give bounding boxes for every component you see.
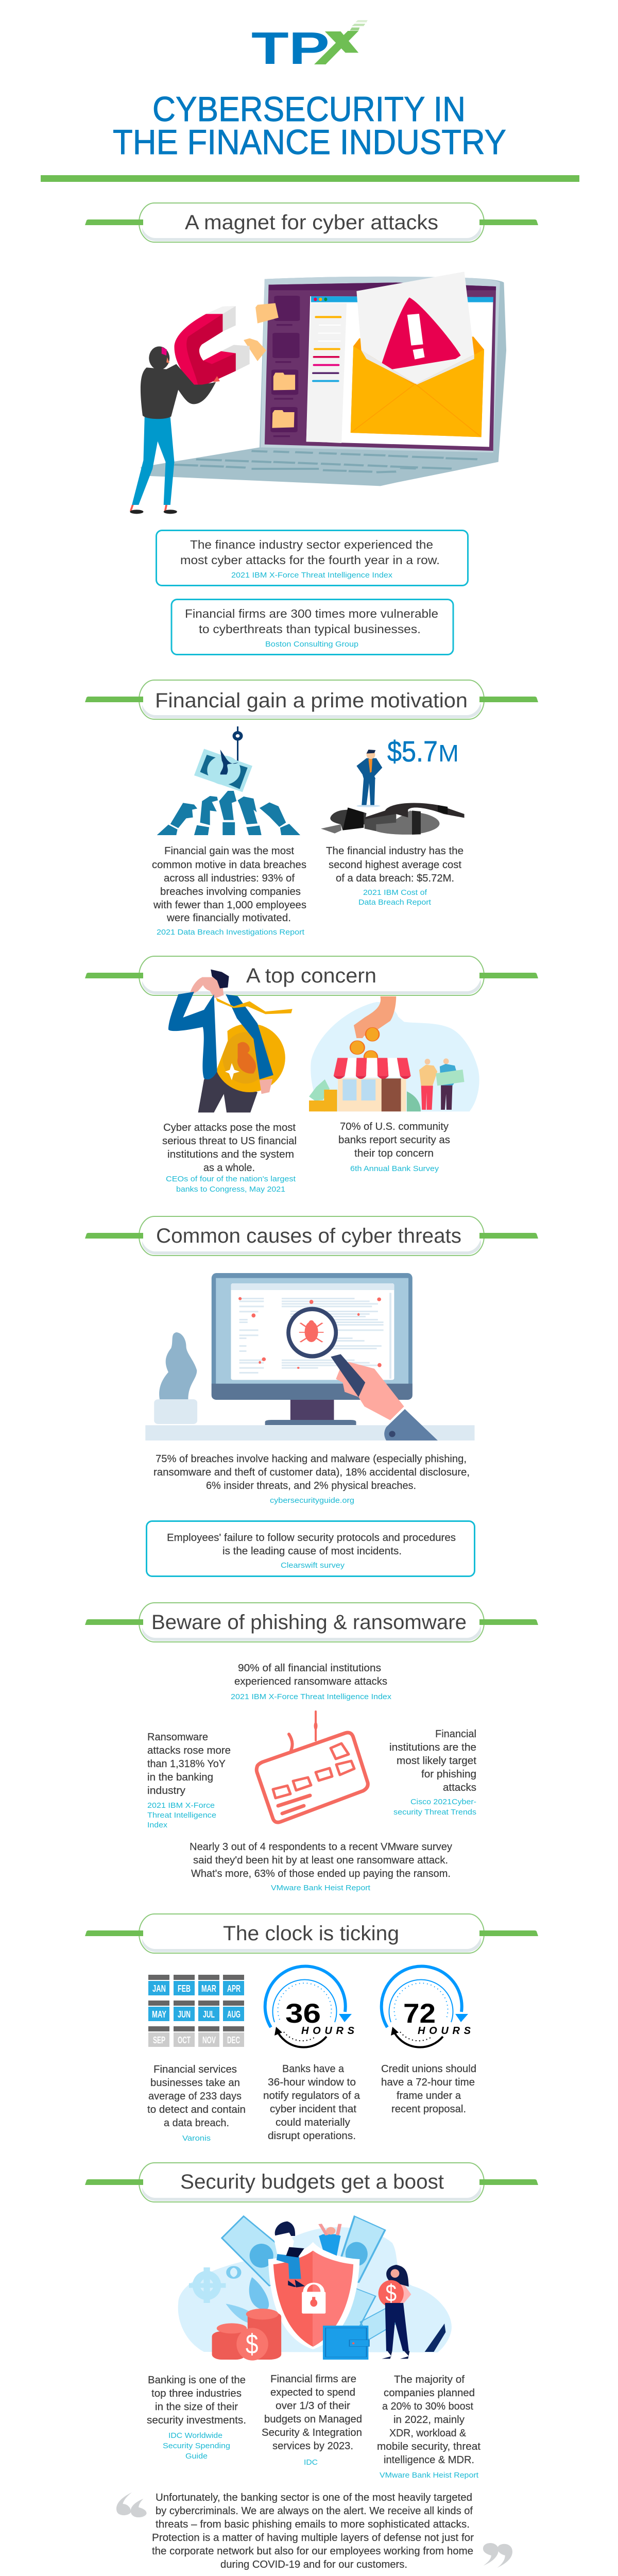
icon: twelve month calendar <box>148 1975 244 2047</box>
icon: closing quote mark <box>483 2543 512 2568</box>
text: spending on managed security <box>262 2374 362 2467</box>
text: top threat: serious threat to US financial <box>162 1136 297 1147</box>
illustration: monitor, magnifier and bug <box>145 1273 475 1440</box>
text: breach cost: of a data breach: $5.72M. <box>336 873 454 884</box>
text: ransomware rose: Threat Intelligence <box>147 1811 216 1820</box>
icon: twelve month calendar: MAR <box>201 1984 216 1994</box>
panel: callout employees: Clearswift survey <box>281 1561 345 1570</box>
icon: 72 hours clock: HOURS <box>418 2025 471 2037</box>
text: breach cost: second highest average cost <box>329 859 461 871</box>
heading: The clock is ticking <box>85 1914 538 1953</box>
text: financial gain: common motive in data breaches <box>152 859 306 871</box>
text: ransomware 90%: 2021 IBM X-Force Threat Intelligence Index <box>231 1692 392 1701</box>
text: top three industries: security investments. <box>147 2415 246 2426</box>
text: quote: during COVID-19 and for our customers. <box>220 2559 407 2570</box>
text: budget boost: The majority of <box>394 2374 465 2385</box>
text: 72-hour frame: have a 72-hour time <box>381 2077 475 2088</box>
text: 72-hour frame: frame under a <box>397 2090 461 2102</box>
icon: twelve month calendar: APR <box>227 1984 241 1994</box>
icon: twelve month calendar: JUL <box>203 2009 215 2020</box>
text: 72-hour frame: recent proposal. <box>391 2104 466 2115</box>
text: top three industries: IDC Worldwide <box>168 2431 222 2440</box>
text: top threat: as a whole. <box>203 1162 255 1174</box>
icon: twelve month calendar: SEP <box>153 2035 165 2045</box>
text: breach cost: Data Breach Report <box>358 898 432 907</box>
heading: Financial gain a prime motivation: Financial gain a prime motivation <box>155 689 468 712</box>
text: ransomware rose: 2021 IBM X-Force <box>147 1801 215 1810</box>
panel: callout 300 times <box>171 600 453 654</box>
heading: A top concern <box>85 956 538 995</box>
icon: twelve month calendar: AUG <box>227 2009 241 2020</box>
heading: Common causes of cyber threats <box>85 1216 538 1256</box>
heading: A magnet for cyber attacks: A magnet for cyber attacks <box>185 211 438 234</box>
text: budget boost: XDR, workload & <box>389 2428 467 2439</box>
heading: A magnet for cyber attacks <box>85 203 538 242</box>
text: financial gain: 2021 Data Breach Investigations Report <box>157 928 305 937</box>
text: VMware survey: VMware Bank Heist Report <box>271 1884 371 1892</box>
text: spending on managed security: budgets on Managed <box>264 2414 362 2425</box>
text: 36-hour window: notify regulators of a <box>263 2090 360 2102</box>
text: community banks <box>338 1121 450 1173</box>
text: ransomware rose: attacks rose more <box>147 1745 231 1756</box>
figure: $5.7M: $5.7 <box>387 735 438 768</box>
heading: The clock is ticking: The clock is ticking <box>223 1922 399 1945</box>
title: CYBERSECURITY IN <box>152 90 466 129</box>
text: budget boost: VMware Bank Heist Report <box>380 2471 479 2480</box>
text: 72-hour frame: Credit unions should <box>381 2063 476 2075</box>
heading: Beware of phishing & ransomware <box>85 1603 538 1642</box>
panel: callout most attacked: 2021 IBM X-Force Threat Intelligence Index <box>231 571 393 580</box>
panel: callout employees: is the leading cause of most incidents. <box>222 1546 402 1557</box>
text: 233 days: average of 233 days <box>148 2091 242 2102</box>
text: phishing target: Cisco 2021Cyber- <box>410 1798 476 1806</box>
text: 36-hour window <box>263 2063 360 2142</box>
title <box>113 90 506 162</box>
heading: Financial gain a prime motivation <box>85 680 538 719</box>
text: phishing target: Financial <box>435 1728 476 1740</box>
text: spending on managed security: Financial firms are <box>270 2374 356 2385</box>
figure: $5.7M: M <box>438 740 459 767</box>
title: THE FINANCE INDUSTRY <box>113 123 506 162</box>
text: quote <box>152 2492 474 2576</box>
text: ransomware 90%: 90% of all financial institutions <box>238 1663 381 1674</box>
text: top threat <box>162 1122 297 1194</box>
panel: callout most attacked: most cyber attacks for the fourth year in a row. <box>180 553 440 567</box>
text: 36-hour window: cyber incident that <box>270 2104 356 2115</box>
text: ransomware rose: Ransomware <box>147 1732 208 1743</box>
text: top three industries <box>147 2375 246 2461</box>
text: breach causes: 75% of breaches involve hacking and malware (especially phishing, <box>156 1453 467 1465</box>
text: phishing target: most likely target <box>397 1755 476 1767</box>
illustration: security budget shield <box>178 2216 452 2361</box>
text: VMware survey: said they'd been hit by at least one ransomware attack. <box>193 1855 448 1866</box>
text: spending on managed security: expected to spend <box>270 2387 355 2398</box>
text: budget boost: a 20% to 30% boost <box>382 2401 473 2412</box>
text: ransomware rose: Index <box>147 1821 168 1829</box>
text: 233 days: businesses take an <box>150 2077 240 2089</box>
heading: A top concern: A top concern <box>246 964 376 987</box>
logo: TPX top: TP <box>251 23 330 74</box>
icon: 72 hours clock: 72 <box>403 1998 436 2029</box>
text: budget boost: companies planned <box>384 2387 475 2399</box>
text: quote: Unfortunately, the banking sector is one of the most heavily targeted <box>156 2492 472 2503</box>
text: phishing target: institutions are the <box>389 1742 476 1753</box>
text: quote: the corporate network but also for our employees working from home <box>152 2546 473 2557</box>
illustration: security budget shield: $ <box>246 2329 259 2360</box>
heading: Security budgets get a boost: Security budgets get a boost <box>180 2171 444 2193</box>
text: breach causes: ransomware and theft of customer data), 18% accidental disclosure, <box>153 1467 470 1478</box>
text: breach cost: 2021 IBM Cost of <box>363 888 427 897</box>
panel: callout employees <box>146 1521 475 1577</box>
text: top threat: banks to Congress, May 2021 <box>176 1185 285 1194</box>
text: quote: Protection is a matter of having multiple layers of defense not just for <box>152 2532 474 2544</box>
illustration: businessman on dollar sign <box>321 750 465 835</box>
illustration: hacker with magnet and laptop <box>130 272 506 514</box>
text: 36-hour window: disrupt operations. <box>268 2130 356 2142</box>
text: breach cost: The financial industry has the <box>326 845 464 857</box>
text: top three industries: in the size of their <box>155 2401 238 2413</box>
text: top three industries: Banking is one of the <box>148 2375 246 2386</box>
icon: 36 hours clock: HOURS <box>301 2025 355 2037</box>
text: ransomware rose: industry <box>147 1785 185 1797</box>
panel: callout employees: Employees' failure to follow security protocols and procedures <box>167 1532 456 1544</box>
text: ransomware rose: than 1,318% YoY <box>147 1758 226 1770</box>
text: quote: threats – from basic phishing emails to more sophisticated attacks. <box>156 2519 470 2530</box>
text: top threat: CEOs of four of the nation's largest <box>166 1175 296 1183</box>
logo: TPX top <box>251 20 368 74</box>
text: financial gain: across all industries: 93% of <box>164 873 295 884</box>
panel: callout 300 times: Boston Consulting Group <box>265 640 358 649</box>
icon: 36 hours clock: 36 <box>285 1998 321 2029</box>
text: budget boost: intelligence & MDR. <box>384 2454 474 2466</box>
icon: credit card on hook <box>256 1711 368 1822</box>
panel: callout 300 times: Financial firms are 300 times more vulnerable <box>185 607 438 620</box>
text: financial gain: with fewer than 1,000 employees <box>153 900 306 911</box>
illustration: businessman holding coin <box>168 970 293 1112</box>
text: phishing target <box>389 1728 476 1817</box>
text: spending on managed security: services by 2023. <box>272 2441 353 2452</box>
heading: Security budgets get a boost <box>85 2163 538 2202</box>
text: breach causes <box>153 1453 470 1505</box>
text: community banks: banks report security as <box>338 1134 450 1146</box>
icon: twelve month calendar: JAN <box>152 1984 166 1994</box>
illustration: security budget shield: $ <box>385 2279 397 2307</box>
text: 72-hour frame <box>381 2063 476 2115</box>
text: financial gain: were financially motivated. <box>166 912 291 924</box>
text: financial gain: Financial gain was the most <box>164 845 294 857</box>
text: community banks: 6th Annual Bank Survey <box>350 1164 439 1173</box>
text: 36-hour window: 36-hour window to <box>268 2077 356 2088</box>
green title rule <box>41 175 579 182</box>
text: spending on managed security: Security & Integration <box>262 2427 362 2438</box>
text: top threat: Cyber attacks pose the most <box>163 1122 296 1133</box>
text: phishing target: for phishing <box>421 1769 476 1780</box>
text: breach cost <box>326 845 464 907</box>
heading: Beware of phishing & ransomware: Beware of phishing & ransomware <box>151 1611 467 1634</box>
text: top three industries: Security Spending <box>163 2442 230 2450</box>
icon: twelve month calendar: JUN <box>178 2009 191 2020</box>
text: VMware survey: Nearly 3 out of 4 respondents to a recent VMware survey <box>190 1841 452 1853</box>
text: financial gain: breaches involving companies <box>160 886 301 897</box>
text: ransomware rose: in the banking <box>147 1772 213 1783</box>
text: top threat: institutions and the system <box>167 1149 294 1160</box>
text: budget boost: mobile security, threat <box>377 2441 480 2452</box>
text: 36-hour window: could materially <box>276 2117 350 2128</box>
text: budget boost <box>377 2374 480 2480</box>
panel: callout most attacked <box>157 531 468 585</box>
text: 233 days: Varonis <box>182 2134 211 2143</box>
text: spending on managed security: IDC <box>304 2458 318 2467</box>
text: financial gain <box>152 845 306 937</box>
text: breach causes: 6% insider threats, and 2% physical breaches. <box>206 1480 416 1492</box>
heading: Common causes of cyber threats: Common causes of cyber threats <box>156 1225 461 1247</box>
text: 233 days: a data breach. <box>164 2117 229 2129</box>
text: ransomware 90%: experienced ransomware attacks <box>234 1676 387 1687</box>
text: breach causes: cybersecurityguide.org <box>270 1496 354 1505</box>
text: phishing target: security Threat Trends <box>393 1808 476 1817</box>
illustration: shop and coins <box>309 996 479 1111</box>
text: top three industries: Guide <box>185 2452 208 2461</box>
icon: twelve month calendar: NOV <box>202 2035 216 2045</box>
icon: twelve month calendar: FEB <box>178 1984 191 1994</box>
text: top three industries: top three industries <box>151 2388 242 2399</box>
text: community banks: their top concern <box>354 1148 434 1159</box>
text: spending on managed security: over 1/3 of their <box>276 2400 350 2412</box>
text: quote: by cybercriminals. We are always on the alert. We receive all kinds of <box>156 2505 473 2517</box>
text: VMware survey: What's more, 63% of those ended up paying the ransom. <box>191 1868 451 1879</box>
icon: twelve month calendar: MAY <box>152 2009 166 2020</box>
icon: twelve month calendar: DEC <box>227 2035 240 2045</box>
icon: 36 hours clock <box>265 1967 355 2047</box>
text: phishing target: attacks <box>443 1782 476 1793</box>
text: budget boost: in 2022, mainly <box>393 2414 465 2426</box>
icon: opening quote mark <box>116 2493 147 2517</box>
text: ransomware 90% <box>231 1663 392 1701</box>
text: community banks: 70% of U.S. community <box>340 1121 449 1132</box>
icon: 72 hours clock <box>382 1967 471 2047</box>
text: 233 days <box>147 2064 246 2143</box>
text: 36-hour window: Banks have a <box>282 2063 345 2075</box>
illustration: hook with money and reaching hands <box>157 726 300 835</box>
panel: callout 300 times: to cyberthreats than typical businesses. <box>199 622 421 636</box>
panel: callout most attacked: The finance industry sector experienced the <box>190 538 433 551</box>
text: ransomware rose <box>147 1732 231 1829</box>
text: 233 days: to detect and contain <box>147 2104 246 2115</box>
text: 233 days: Financial services <box>153 2064 237 2075</box>
text: VMware survey <box>190 1841 452 1892</box>
icon: twelve month calendar: OCT <box>178 2035 191 2045</box>
